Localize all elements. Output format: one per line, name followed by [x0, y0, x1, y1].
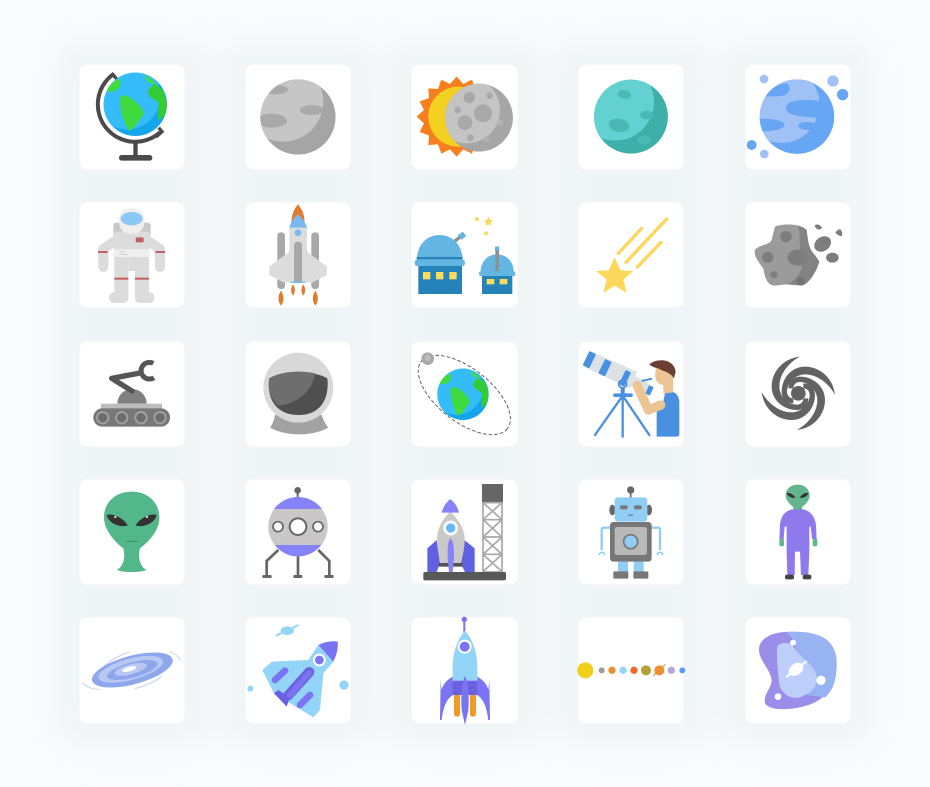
icon: person with telescope	[583, 351, 679, 437]
icon: astronaut helmet	[263, 353, 333, 434]
icon: astronaut	[98, 208, 165, 303]
icon: space shuttle	[269, 204, 327, 306]
icon: tall rocket	[440, 617, 490, 725]
icon: robotic rover	[93, 362, 170, 427]
icon: observatory	[415, 216, 515, 294]
icon: robot	[599, 486, 663, 579]
icon: earth orbit	[405, 340, 524, 450]
icon: alien head	[104, 492, 159, 572]
icon: spiral galaxy grey	[762, 357, 835, 430]
icon: asteroid	[754, 224, 842, 286]
icon: rocket on launch pad	[423, 484, 506, 580]
icon: nebula	[759, 632, 837, 709]
icon: alien figure	[779, 485, 817, 579]
icon: blue planet with moons	[746, 74, 848, 158]
soft card glow	[59, 44, 871, 743]
icon: solar system row	[577, 662, 685, 678]
icon: diagonal spaceship	[247, 625, 349, 717]
icon: lunar lander	[262, 487, 334, 578]
icon: solar eclipse	[417, 77, 513, 157]
icon: grey moon	[260, 79, 336, 154]
white card grid	[79, 64, 851, 724]
icon: desk globe	[94, 63, 169, 161]
icon: purple galaxy	[83, 645, 181, 695]
icon: shooting star	[596, 219, 667, 293]
icon: teal planet	[594, 80, 668, 154]
